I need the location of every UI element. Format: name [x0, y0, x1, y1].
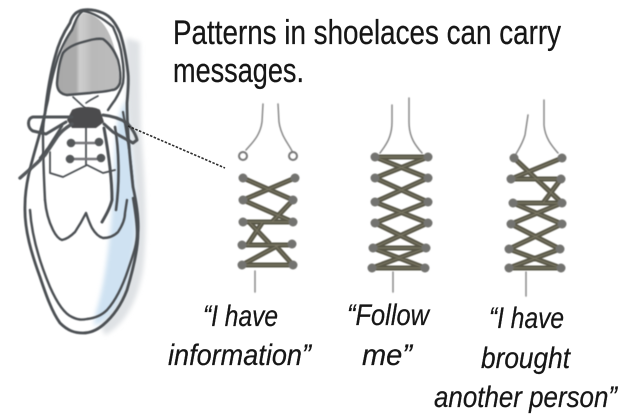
lacing pattern: I have information: [238, 104, 300, 292]
toe cap seam: [57, 39, 120, 95]
caption: I have brought another person: “I have: [489, 302, 564, 335]
lacing pattern: Follow me: [368, 98, 432, 292]
shoe blue shading: [94, 100, 136, 326]
caption: I have information: information”: [168, 339, 313, 372]
icon: wingtip shoe seen from above: [20, 10, 146, 335]
top loose lace ends with eyelets: [239, 104, 297, 292]
title: [173, 14, 561, 90]
inner welt line: [30, 198, 137, 320]
caption: Follow me: me”: [362, 339, 414, 372]
eyestay: [50, 152, 115, 177]
right bow: [103, 115, 137, 143]
tongue stem: [73, 96, 98, 108]
title: messages.: [173, 52, 304, 90]
wingtip brogue: [45, 200, 127, 240]
lacing pattern: I have brought another person: [504, 100, 566, 296]
shoe shadow: [100, 38, 146, 335]
caption: I have brought another person: brought: [481, 342, 571, 375]
dotted leader line: [128, 126, 225, 168]
vamp inner lines: [43, 11, 83, 200]
shoe lace knot: [20, 107, 137, 178]
caption: Follow me: “Follow: [347, 299, 431, 332]
toe cap grey: [57, 13, 120, 95]
caption: I have information: [168, 300, 313, 372]
shoe outer outline: [25, 10, 138, 333]
caption: I have brought another person: [434, 302, 619, 414]
left bow: [28, 117, 72, 134]
side stitching: [102, 128, 112, 222]
caption: I have information: “I have: [203, 300, 278, 333]
eyelets: [70, 143, 101, 159]
caption: Follow me: [347, 299, 431, 372]
